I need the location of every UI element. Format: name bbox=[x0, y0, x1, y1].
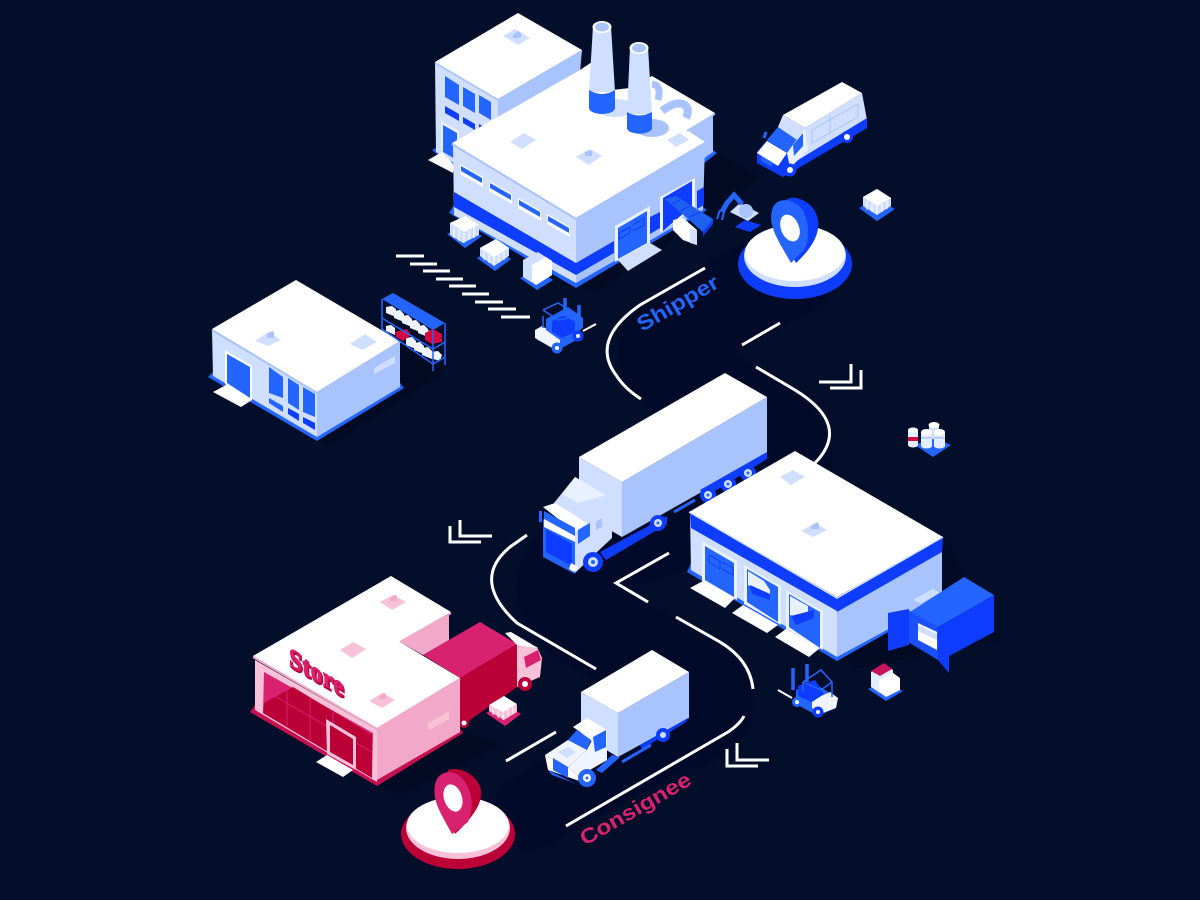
trailer bbox=[579, 373, 767, 537]
right warehouse bbox=[687, 451, 943, 661]
small pallet right bbox=[859, 189, 895, 221]
chimney 2 bbox=[627, 42, 652, 134]
bay door 3 bbox=[775, 590, 823, 657]
robotic arm bbox=[717, 195, 761, 232]
van bbox=[757, 82, 867, 177]
forklift top bbox=[535, 298, 596, 354]
bay door 1 bbox=[690, 541, 737, 608]
store sign: Store bbox=[289, 641, 344, 703]
factory loading bay bbox=[660, 178, 713, 245]
store door bbox=[316, 719, 356, 777]
semi truck bbox=[539, 373, 767, 574]
store sign: Store bbox=[290, 643, 345, 705]
factory: main hall bbox=[449, 62, 717, 288]
shipper location pin bbox=[738, 198, 852, 299]
red delivery truck bbox=[423, 622, 542, 728]
building shadows bbox=[315, 145, 1000, 795]
factory windows bbox=[460, 164, 570, 237]
pallet boxes with red lid bbox=[868, 663, 903, 701]
factory blue band bbox=[454, 192, 614, 275]
chevron arrow: bottom bbox=[727, 743, 769, 766]
left warehouse building bbox=[208, 280, 404, 441]
rack boxes bottom row bbox=[386, 325, 442, 361]
pallet stacks bbox=[447, 216, 553, 290]
factory: back office building bbox=[428, 13, 600, 190]
route lines bbox=[492, 268, 830, 826]
trailer axle bbox=[674, 452, 767, 512]
storage rack bbox=[382, 293, 445, 371]
bay door 2 bbox=[732, 565, 781, 633]
dashed path to warehouse bbox=[396, 256, 530, 317]
red pallet bbox=[486, 696, 521, 726]
road bbox=[530, 270, 790, 812]
consignee location pin bbox=[401, 769, 515, 869]
forklift bottom bbox=[778, 664, 838, 718]
chimney 1 bbox=[589, 21, 615, 114]
barrel pallet bbox=[908, 422, 951, 457]
rack boxes top row bbox=[386, 306, 436, 340]
chevron arrow: top right bbox=[819, 364, 861, 388]
label: Shipper: Shipper bbox=[632, 270, 723, 336]
truck chassis bbox=[600, 516, 667, 560]
factory roof details bbox=[510, 84, 689, 165]
factory door bbox=[615, 206, 662, 271]
chevron arrow: middle left bbox=[450, 520, 492, 542]
store bbox=[250, 576, 542, 786]
truck cab bbox=[539, 477, 612, 574]
label: Consignee: Consignee bbox=[575, 767, 695, 850]
open shipping container bbox=[888, 577, 994, 673]
delivery truck bbox=[545, 650, 689, 787]
